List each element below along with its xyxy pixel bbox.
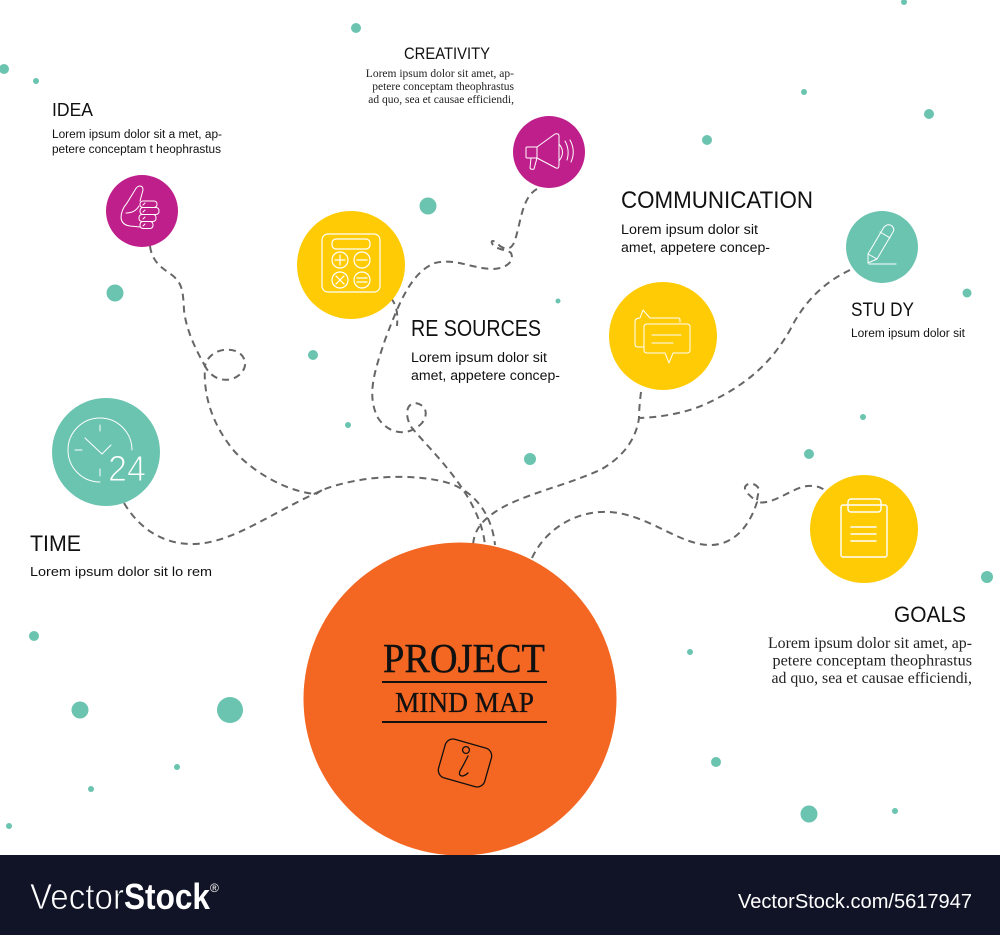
heading: study: STU DY	[851, 300, 914, 321]
node: goals	[768, 475, 972, 687]
footer logo: Vector	[30, 876, 124, 917]
heading: time: TIME	[30, 531, 81, 556]
icon: clipboard	[841, 499, 887, 557]
text: study description: Lorem ipsum dolor sit	[851, 328, 966, 340]
icon: megaphone	[526, 134, 573, 169]
heading: idea: IDEA	[52, 100, 93, 120]
text: resources description: Lorem ipsum dolor sit	[411, 350, 547, 365]
text: goals description: Lorem ipsum dolor sit amet, ap-	[768, 635, 972, 652]
heading: creativity: CREATIVITY	[404, 44, 490, 63]
heading: communication: COMMUNICATION	[621, 187, 813, 214]
text: communication description: Lorem ipsum dolor sit	[621, 222, 758, 237]
icon: chat bubbles	[635, 310, 690, 363]
node: creativity	[366, 44, 585, 188]
icon: 24 hour clock: 24	[108, 448, 146, 489]
text: idea description	[52, 129, 222, 156]
text: creativity description: petere conceptam theophrastus	[372, 81, 515, 93]
icon: thumbs up	[121, 186, 159, 228]
icon: pencil	[868, 225, 896, 264]
text: idea description: petere conceptam t heophrastus	[52, 144, 221, 156]
node: idea	[52, 100, 222, 247]
text: resources description	[411, 350, 560, 383]
node: resources	[297, 211, 560, 383]
text: creativity description	[366, 68, 515, 106]
text: idea description: Lorem ipsum dolor sit a met, ap-	[52, 129, 222, 141]
text: communication description: amet, appetere concep-	[621, 240, 770, 255]
footer image id: VectorStock.com/5617947	[738, 891, 972, 913]
heading: goals: GOALS	[894, 602, 966, 627]
text: goals description: petere conceptam theophrastus	[772, 652, 972, 670]
text: goals description	[768, 635, 972, 687]
text: time description: Lorem ipsum dolor sit lo rem	[30, 564, 212, 579]
text: creativity description: Lorem ipsum dolor sit amet, ap-	[366, 68, 514, 80]
footer logo: Stock	[124, 876, 211, 917]
footer bar	[0, 855, 1000, 935]
text: resources description: amet, appetere concep-	[411, 368, 560, 383]
icon: info	[436, 737, 494, 789]
footer logo	[30, 876, 219, 917]
heading: resources: RE SOURCES	[411, 315, 541, 341]
heading: mind map: MIND MAP	[395, 688, 534, 719]
text: creativity description: ad quo, sea et causae efficiendi,	[368, 94, 514, 106]
node: study	[846, 211, 966, 340]
text: goals description: ad quo, sea et causae efficiendi,	[772, 670, 972, 687]
node: time	[30, 398, 212, 579]
icon: calculator	[322, 234, 380, 292]
text: communication description	[621, 222, 770, 255]
icon: 24 hour clock	[68, 418, 146, 489]
heading: project: PROJECT	[383, 635, 545, 681]
central node: project mind map	[304, 542, 616, 856]
dashed connector paths	[124, 189, 850, 558]
node: communication	[609, 187, 813, 390]
footer logo: ®	[210, 881, 219, 895]
